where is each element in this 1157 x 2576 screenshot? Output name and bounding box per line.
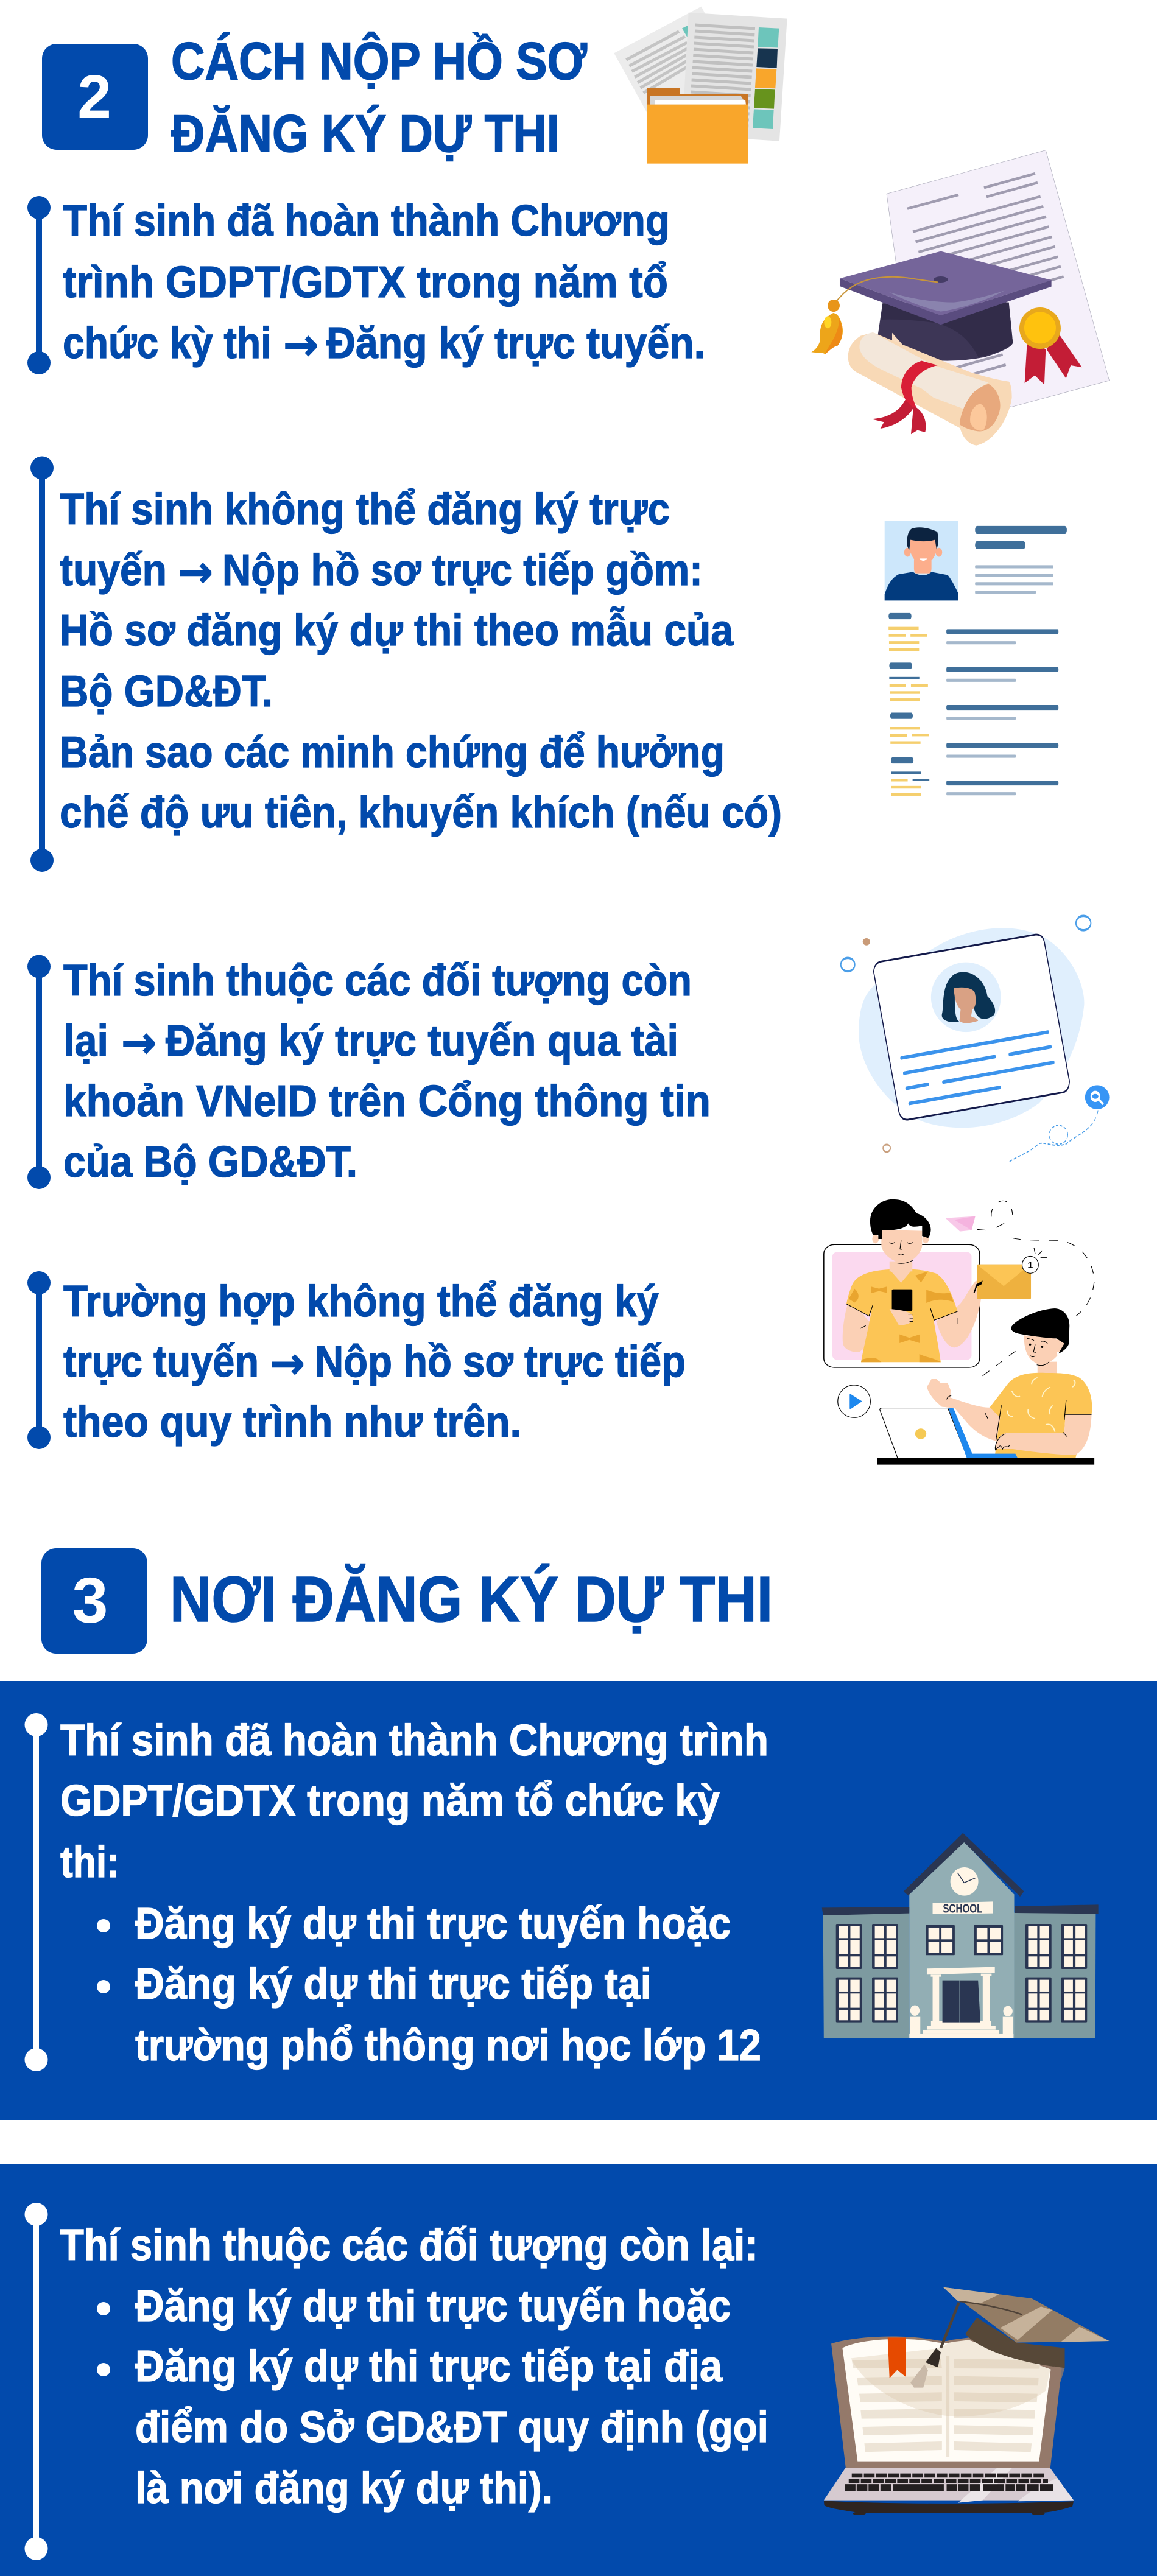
text: VNeID registration: → — [121, 1017, 156, 1068]
text: registration options for other candidates: Đăng ký dự thi trực tiếp tại địa — [135, 2342, 723, 2391]
icon: documents and folder — [614, 7, 787, 164]
section 3 header — [41, 1548, 773, 1654]
badge: number 2: 2 — [77, 63, 111, 131]
heading: cách nộp hồ sơ đăng ký dự thi: ĐĂNG KÝ DỰ THI — [171, 105, 560, 163]
text: registration options for other candidates: là nơi đăng ký dự thi). — [135, 2464, 553, 2513]
text: direct submission: tuyến — [60, 546, 167, 595]
panel: remaining candidates — [0, 2164, 1157, 2576]
text: online registration: trình GDPT/GDTX trong năm tổ — [63, 258, 668, 307]
text: VNeID registration — [63, 956, 711, 1187]
text: direct submission: Bộ GD&ĐT. — [60, 667, 273, 716]
timeline marker — [24, 2203, 47, 2560]
badge: number 2 — [42, 44, 148, 150]
badge: number 3 — [41, 1548, 147, 1654]
text block 1 with timeline — [27, 196, 705, 374]
panel: graduating students — [0, 1681, 1157, 2120]
icon: graduation cap, diploma and certificate — [811, 150, 1110, 446]
text: fallback direct submission: theo quy trình như trên. — [63, 1398, 521, 1447]
text: VNeID registration: Thí sinh thuộc các đối tượng còn — [63, 956, 692, 1005]
timeline marker — [27, 955, 51, 1189]
icon: school building: SCHOOL — [943, 1902, 982, 1915]
text: online registration: Đăng ký trực tuyến. — [326, 319, 705, 368]
text: registration options for graduates: thi: — [60, 1838, 119, 1887]
text: direct submission: Nộp hồ sơ trực tiếp gồm: — [222, 546, 703, 595]
text: online registration — [63, 197, 705, 370]
text: fallback direct submission: Trường hợp không thể đăng ký — [63, 1277, 659, 1326]
icon: laptop with open book and graduation cap — [824, 2287, 1110, 2515]
text: online registration: Thí sinh đã hoàn thành Chương — [63, 197, 670, 245]
timeline marker — [27, 1271, 51, 1449]
text block 2 with timeline — [30, 457, 782, 872]
heading: cách nộp hồ sơ đăng ký dự thi: CÁCH NỘP HỒ SƠ — [171, 32, 588, 91]
text: registration options for graduates — [60, 1716, 768, 2070]
badge: number 3: 3 — [72, 1565, 108, 1637]
text: online registration: chức kỳ thi — [63, 319, 272, 368]
heading: nơi đăng ký dự thi: NƠI ĐĂNG KÝ DỰ THI — [170, 1563, 773, 1635]
text: registration options for graduates: trường phổ thông nơi học lớp 12 — [135, 2021, 761, 2070]
text: direct submission: chế độ ưu tiên, khuyến khích (nếu có) — [60, 788, 782, 837]
text: registration options for other candidates: điểm do Sở GD&ĐT quy định (gọi — [135, 2403, 768, 2452]
timeline marker — [24, 1713, 47, 2071]
text: registration options for other candidates — [60, 2221, 768, 2513]
timeline marker — [30, 457, 54, 872]
heading: cách nộp hồ sơ đăng ký dự thi — [171, 32, 588, 163]
section 2 header — [42, 32, 588, 163]
text: fallback direct submission: Nộp hồ sơ trực tiếp — [315, 1338, 686, 1386]
text: direct submission — [60, 485, 782, 837]
text: registration options for graduates: Đăng ký dự thi trực tiếp tại — [135, 1960, 652, 2009]
icon: resume document — [885, 521, 1067, 796]
text: registration options for other candidates: Thí sinh thuộc các đối tượng còn lại: — [60, 2221, 758, 2270]
text: VNeID registration: Đăng ký trực tuyến qua tài — [166, 1017, 678, 1065]
icon: two people in a video call: 1 — [1027, 1261, 1033, 1270]
text: online registration: → — [283, 319, 318, 370]
text: VNeID registration: khoản VNeID trên Cổng thông tin — [63, 1077, 711, 1126]
text: direct submission: Thí sinh không thể đăng ký trực — [60, 485, 670, 534]
text: VNeID registration: lại — [63, 1017, 108, 1065]
timeline marker — [27, 196, 51, 374]
icon: school building — [822, 1833, 1099, 2038]
text: direct submission: Hồ sơ đăng ký dự thi theo mẫu của — [60, 606, 734, 655]
text block 4 with timeline — [27, 1271, 686, 1449]
text: fallback direct submission — [63, 1277, 686, 1447]
text: registration options for graduates: Đăng ký dự thi trực tuyến hoặc — [135, 1900, 731, 1948]
text: registration options for graduates: GDPT/GDTX trong năm tổ chức kỳ — [60, 1777, 720, 1825]
icon: two people in a video call — [824, 1199, 1094, 1465]
text: fallback direct submission: trực tuyến — [63, 1338, 259, 1386]
text: registration options for other candidates: Đăng ký dự thi trực tuyến hoặc — [135, 2282, 731, 2331]
text: registration options for graduates: Thí sinh đã hoàn thành Chương trình — [60, 1716, 768, 1765]
text: direct submission: → — [178, 546, 213, 597]
text: fallback direct submission: → — [270, 1338, 305, 1389]
text: VNeID registration: của Bộ GD&ĐT. — [63, 1138, 357, 1187]
text: direct submission: Bản sao các minh chứng để hưởng — [60, 728, 725, 777]
text block 3 with timeline — [27, 955, 711, 1189]
icon: ID profile card — [841, 916, 1110, 1162]
